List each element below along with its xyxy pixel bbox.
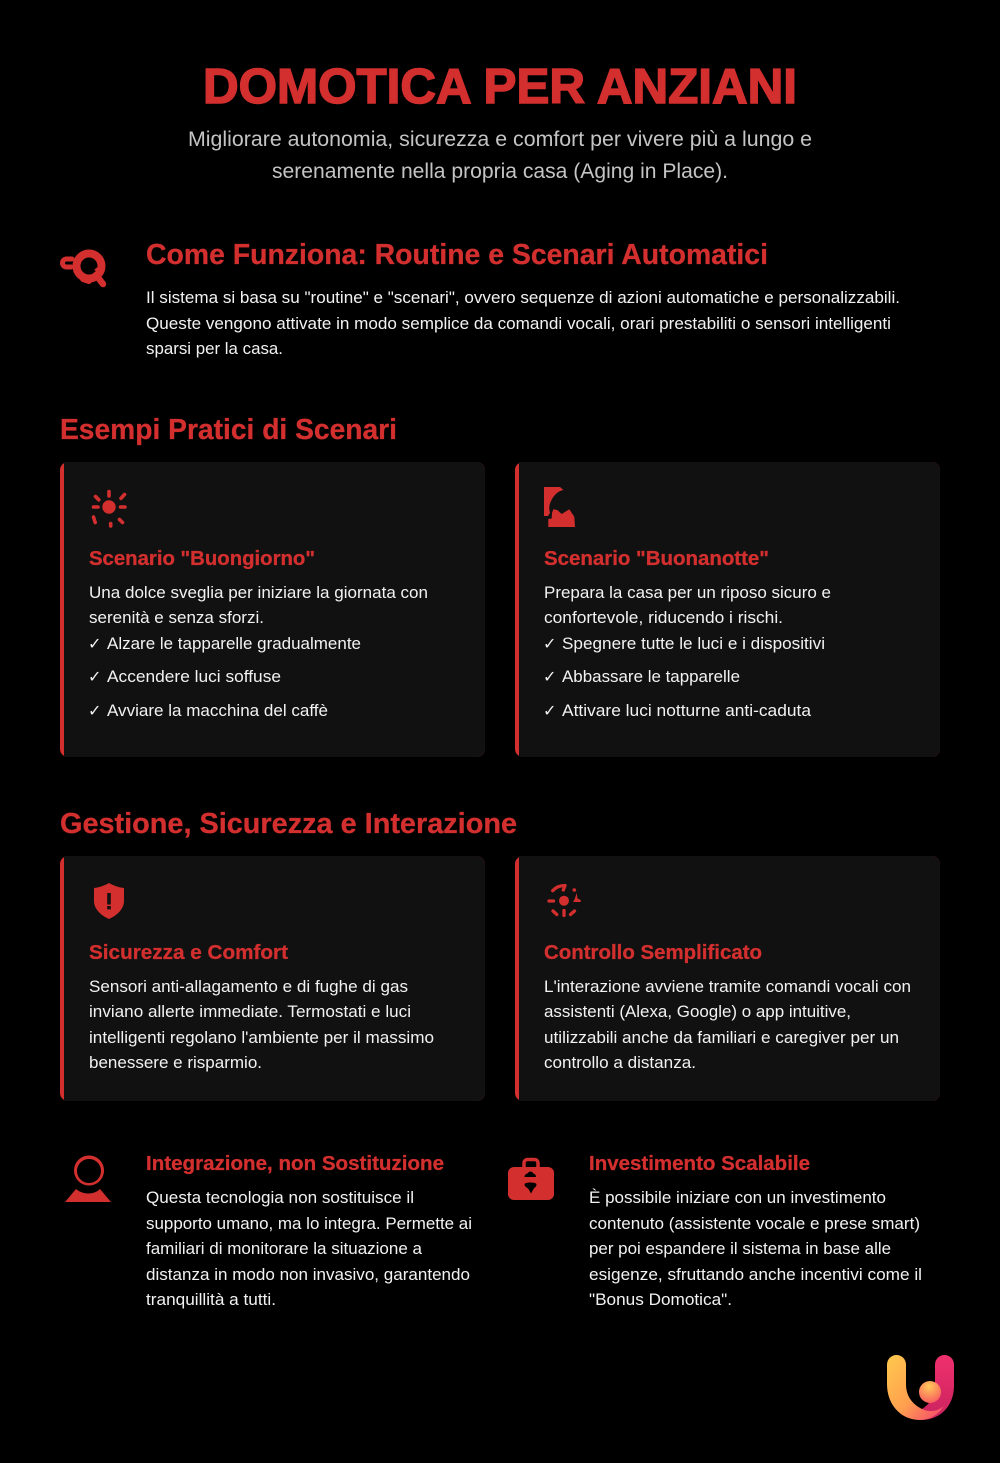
card text: controllo a distanza. [544,1054,696,1072]
icon: shield [94,883,124,919]
checklist: Alzare le tapparelle gradualmente [107,635,361,653]
card text: Prepara la casa per un riposo sicuro e [544,584,831,602]
subtitle: Migliorare autonomia, sicurezza e comfort per vivere più a lungo e [188,128,812,151]
icon: moon and house [544,487,575,527]
checklist [88,634,361,720]
card text [544,978,911,1072]
block: scalable investment [589,1152,922,1309]
checklist: Accendere luci soffuse [107,668,281,686]
block text: supporto umano, ma lo integra. Permette ai [146,1215,472,1233]
block title: Investimento Scalabile [589,1152,810,1175]
heading: management: Gestione, Sicurezza e Interazione [60,808,517,840]
checklist: Attivare luci notturne anti-caduta [562,702,812,720]
card title: Controllo Semplificato [544,941,762,964]
heading: practical examples: Esempi Pratici di Scenari [60,414,397,446]
panel: safety and comfort [60,856,485,1101]
how it works text: Queste vengono attivate in modo semplice da comandi vocali, orari prestabiliti o sensori intelligenti [146,315,891,333]
block text: È possibile iniziare con un investimento [589,1188,886,1207]
card text [89,584,428,627]
card text [544,584,831,627]
checklist: ✓ [543,701,556,720]
card text: serenità e senza sforzi. [89,609,264,627]
card text: confortevole, riducendo i rischi. [544,609,783,627]
card title: Sicurezza e Comfort [89,941,288,964]
block text: per poi espandere il sistema in base alle [589,1240,891,1258]
block title: Integrazione, non Sostituzione [146,1152,444,1175]
card text: L'interazione avviene tramite comandi vocali con [544,978,911,996]
card text: assistenti (Alexa, Google) o app intuitive, [544,1003,851,1021]
checklist: ✓ [88,634,101,653]
card text [89,978,434,1072]
checklist: Spegnere tutte le luci e i dispositivi [562,635,825,653]
block text: "Bonus Domotica". [589,1291,732,1309]
block text: esigenze, sfruttando anche incentivi come il [589,1266,922,1284]
icon: control target [549,886,581,916]
card text: intelligenti regolano l'ambiente per il massimo [89,1029,434,1047]
checklist: ✓ [88,701,101,720]
logo [887,1355,954,1420]
section: how it works [146,239,900,358]
checklist: Abbassare le tapparelle [562,668,740,686]
how it works text: sparsi per la casa. [146,340,283,358]
card text: utilizzabili anche da familiari e caregiver per un [544,1029,899,1047]
panel: good morning scenario [60,462,485,757]
panel: simplified control [515,856,940,1101]
icon: person [65,1156,111,1202]
card text: Una dolce sveglia per iniziare la giornata con [89,584,428,602]
icon: briefcase [508,1160,554,1200]
card text: inviano allerte immediate. Termostati e luci [89,1003,411,1021]
how it works text [146,289,900,358]
block: integration [146,1152,472,1309]
checklist: ✓ [543,634,556,653]
how it works text: Il sistema si basa su "routine" e "scenari", ovvero sequenze di azioni automatiche e personalizzabili. [146,289,900,307]
card title: Scenario "Buongiorno" [89,547,315,570]
checklist [543,634,825,720]
icon: gears routine [62,254,103,284]
card text: benessere e risparmio. [89,1054,262,1072]
card title: Scenario "Buonanotte" [544,547,769,570]
checklist: ✓ [88,667,101,686]
icon: sun [94,492,125,526]
block text [146,1189,472,1309]
subtitle [188,128,812,183]
block text: Questa tecnologia non sostituisce il [146,1189,414,1207]
checklist: Avviare la macchina del caffè [107,702,328,720]
panel: good night scenario [515,462,940,757]
block text: tranquillità a tutti. [146,1291,276,1309]
block text: familiari di monitorare la situazione a [146,1240,423,1258]
title: DOMOTICA PER ANZIANI [203,59,797,114]
subtitle: serenamente nella propria casa (Aging in Place). [272,160,728,183]
block text [589,1188,922,1309]
checklist: ✓ [543,667,556,686]
block text: distanza in modo non invasivo, garantendo [146,1266,470,1284]
heading: how it works: Come Funziona: Routine e Scenari Automatici [146,239,768,271]
block text: contenuto (assistente vocale e prese smart) [589,1215,920,1233]
card text: Sensori anti-allagamento e di fughe di gas [89,978,408,996]
